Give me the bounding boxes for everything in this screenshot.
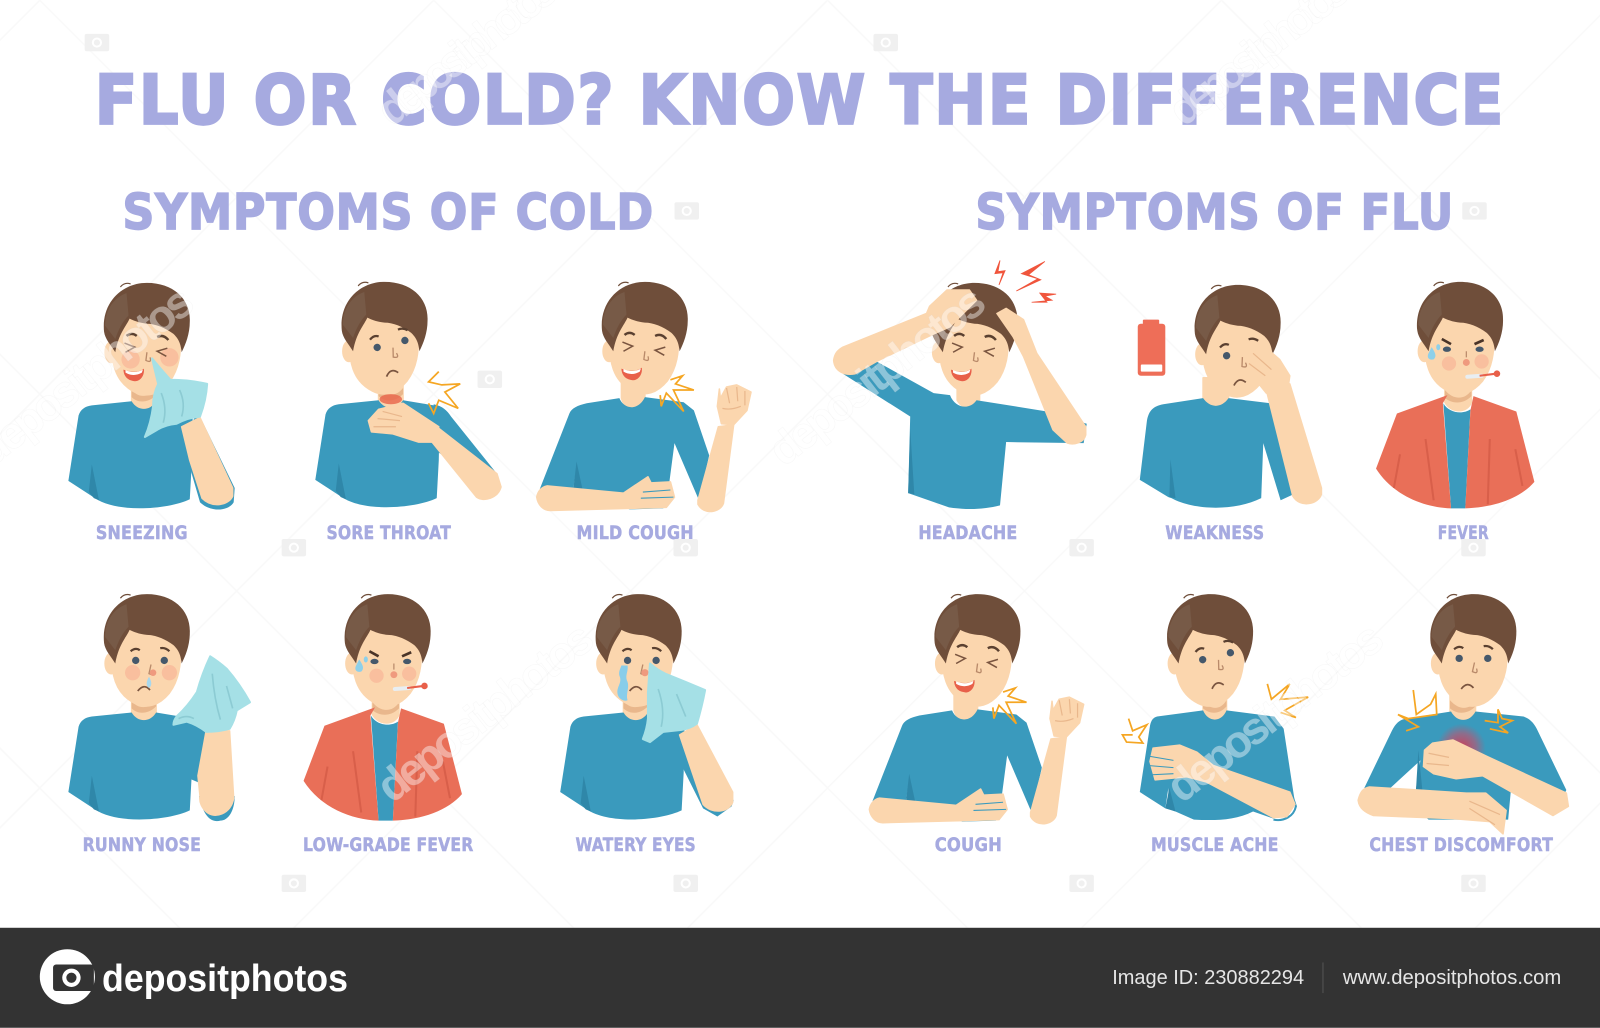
panel: symptoms of cold [68, 282, 751, 856]
figure: cough [869, 594, 1084, 824]
figure: mild cough [537, 282, 751, 512]
figure: watery eyes [560, 594, 734, 820]
label: low-grade fever: LOW-GRADE FEVER [303, 835, 473, 856]
label: weakness: WEAKNESS [1165, 523, 1264, 544]
logo: depositphotos [40, 949, 348, 1004]
label: headache: HEADACHE [918, 523, 1017, 544]
logo: depositphotos: depositphotos [102, 957, 348, 999]
image id: Image ID: 230882294 [1112, 967, 1304, 989]
label: sneezing: SNEEZING [96, 523, 188, 544]
watermark: depositphotos overlay: depositphotos [1156, 612, 1393, 812]
label: sore throat: SORE THROAT [327, 523, 451, 544]
heading: symptoms of flu: SYMPTOMS OF FLU [976, 184, 1454, 241]
panel: symptoms of flu [834, 260, 1568, 856]
footer bar [0, 928, 1600, 1028]
label: fever: FEVER [1438, 523, 1489, 544]
figure: chest discomfort [1358, 594, 1568, 834]
watermark: depositphotos overlay: depositphotos [758, 275, 995, 475]
label: runny nose: RUNNY NOSE [83, 835, 201, 856]
figure: headache [834, 260, 1087, 509]
figure: fever [1376, 282, 1534, 508]
figure: weakness [1140, 285, 1321, 508]
label: cough: COUGH [935, 835, 1002, 856]
figure: muscle ache [1122, 594, 1308, 820]
figure: sneezing [68, 283, 235, 510]
figure: low-grade fever [304, 594, 462, 821]
label: watery eyes: WATERY EYES [576, 835, 696, 856]
label: chest discomfort: CHEST DISCOMFORT [1369, 835, 1553, 856]
figure: sore throat [315, 282, 501, 507]
website url: www.depositphotos.com [1342, 967, 1561, 989]
title: FLU OR COLD? KNOW THE DIFFERENCE [95, 61, 1505, 140]
figure: runny nose [68, 594, 250, 821]
watermark: depositphotos overlay: depositphotos [367, 612, 603, 812]
watermark: camera icons [85, 34, 1487, 892]
label: muscle ache: MUSCLE ACHE [1151, 835, 1279, 856]
heading: symptoms of cold: SYMPTOMS OF COLD [122, 184, 654, 241]
watermark: depositphotos overlay [0, 0, 1393, 812]
label: mild cough: MILD COUGH [577, 523, 694, 544]
icon: low battery [1138, 320, 1165, 376]
